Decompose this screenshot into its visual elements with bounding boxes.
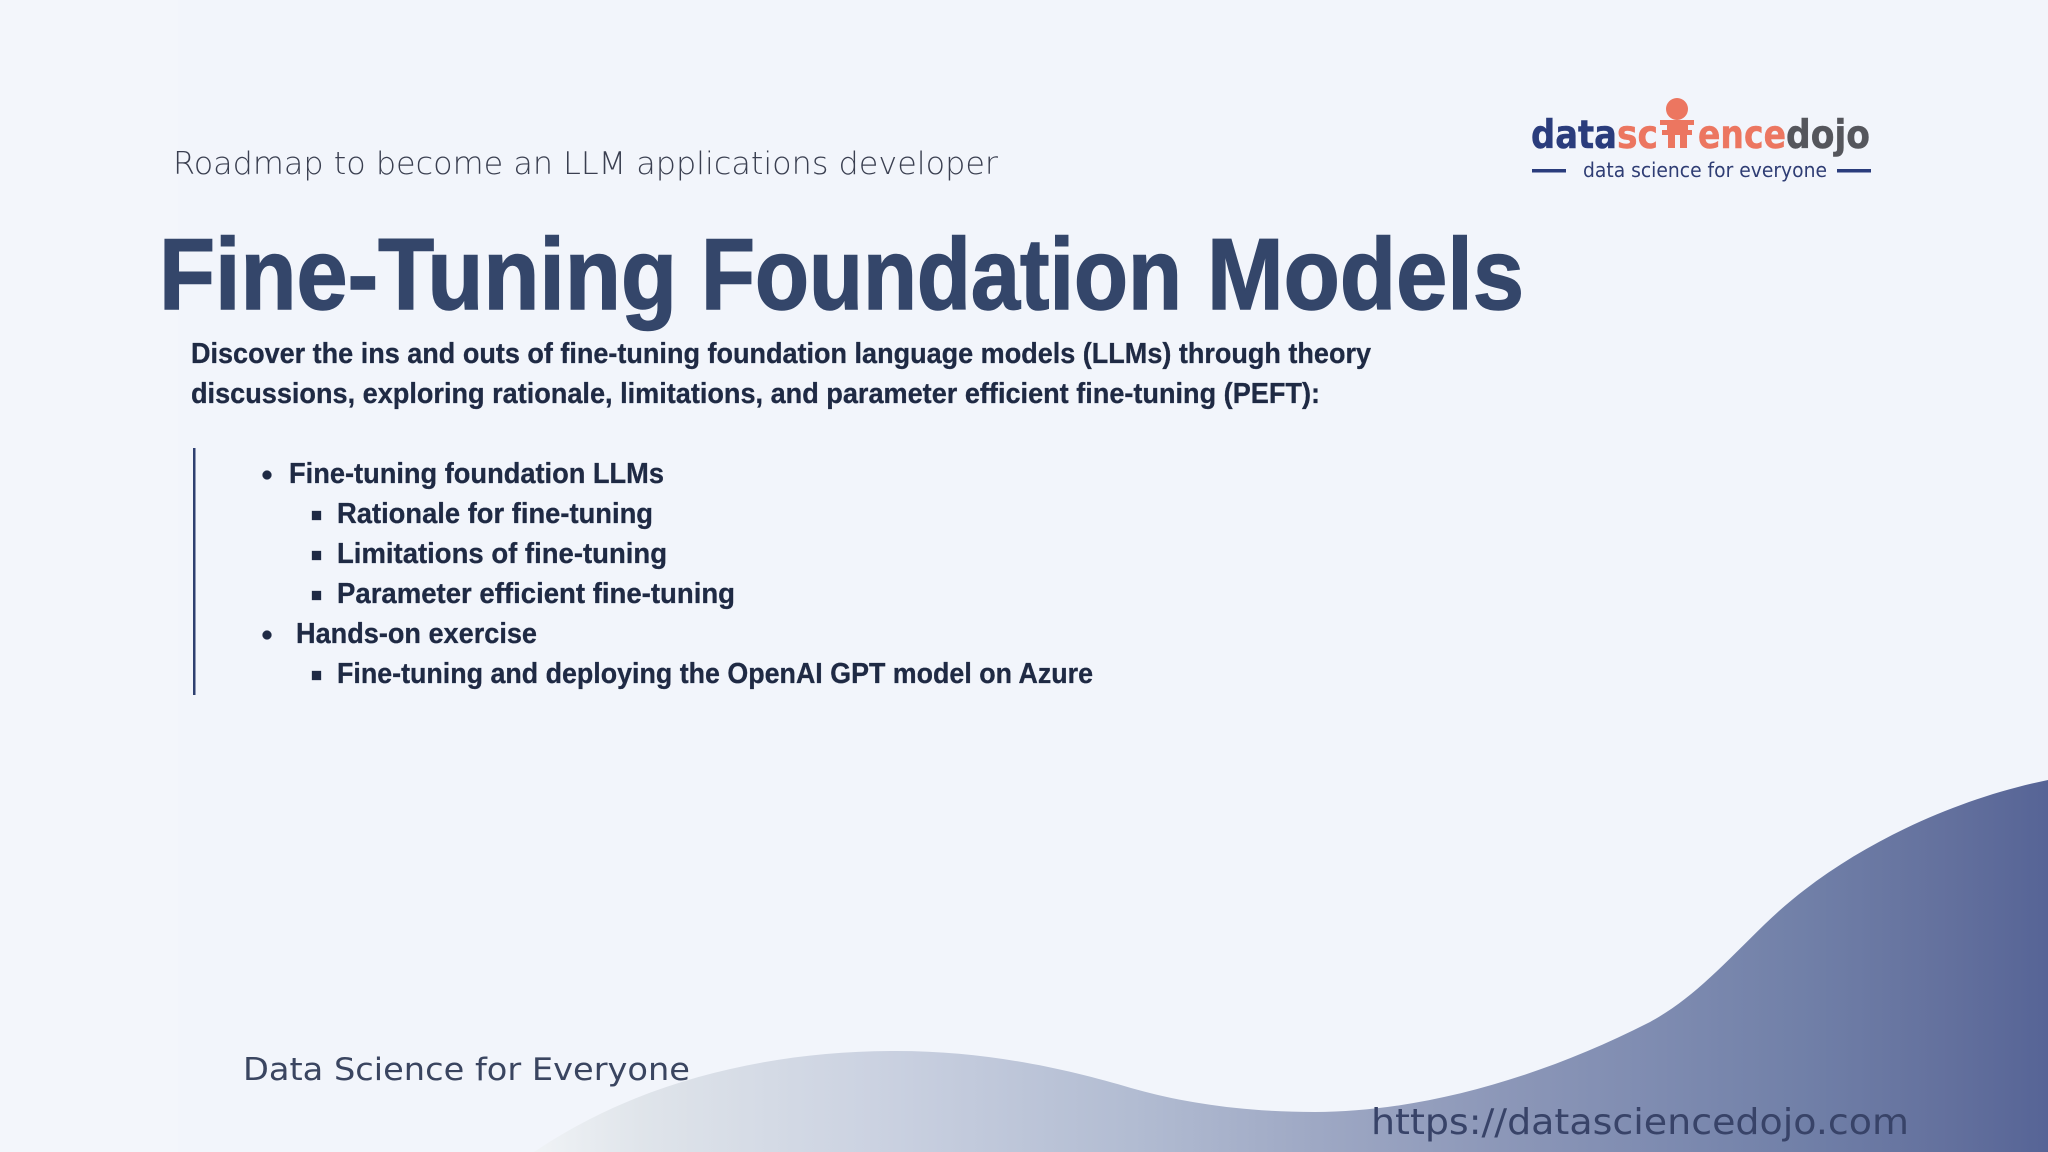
logo: tagline: data science for everyone [1583,158,1827,182]
bullet list: Hands-on exercise [296,618,537,650]
vertical rule [193,448,196,695]
bullet list: Rationale for fine-tuning [337,498,653,530]
bullet list [262,458,1093,690]
title [159,219,1524,331]
title: Foundation [701,219,1182,331]
logo: science: ence [1698,113,1786,158]
bullet list: Limitations of fine-tuning [337,538,667,570]
bullet list: Fine-tuning and deploying the OpenAI GPT model on Azure [337,658,1093,690]
logo: data: data [1531,113,1617,158]
intro text: discussions, exploring rationale, limitations, and parameter efficient fine-tuning (PEFT): [191,378,1320,410]
logo: dojo: dojo [1786,113,1870,158]
bullet list: Parameter efficient fine-tuning [337,578,735,610]
intro text [191,338,1371,410]
logo: science [1617,98,1786,158]
logo [1531,98,1871,182]
title: Models [1207,219,1524,331]
subtitle: Roadmap to become an LLM applications developer [173,146,998,182]
intro text: Discover the ins and outs of fine-tuning foundation language models (LLMs) through theory [191,338,1371,370]
title: Fine-Tuning [159,219,677,331]
footer tagline: Data Science for Everyone [243,1052,690,1088]
bullet list: Fine-tuning foundation LLMs [289,458,664,490]
footer url: https://datasciencedojo.com [1371,1102,1909,1143]
logo: science: sc [1617,113,1658,158]
decorative wave [534,780,2048,1152]
